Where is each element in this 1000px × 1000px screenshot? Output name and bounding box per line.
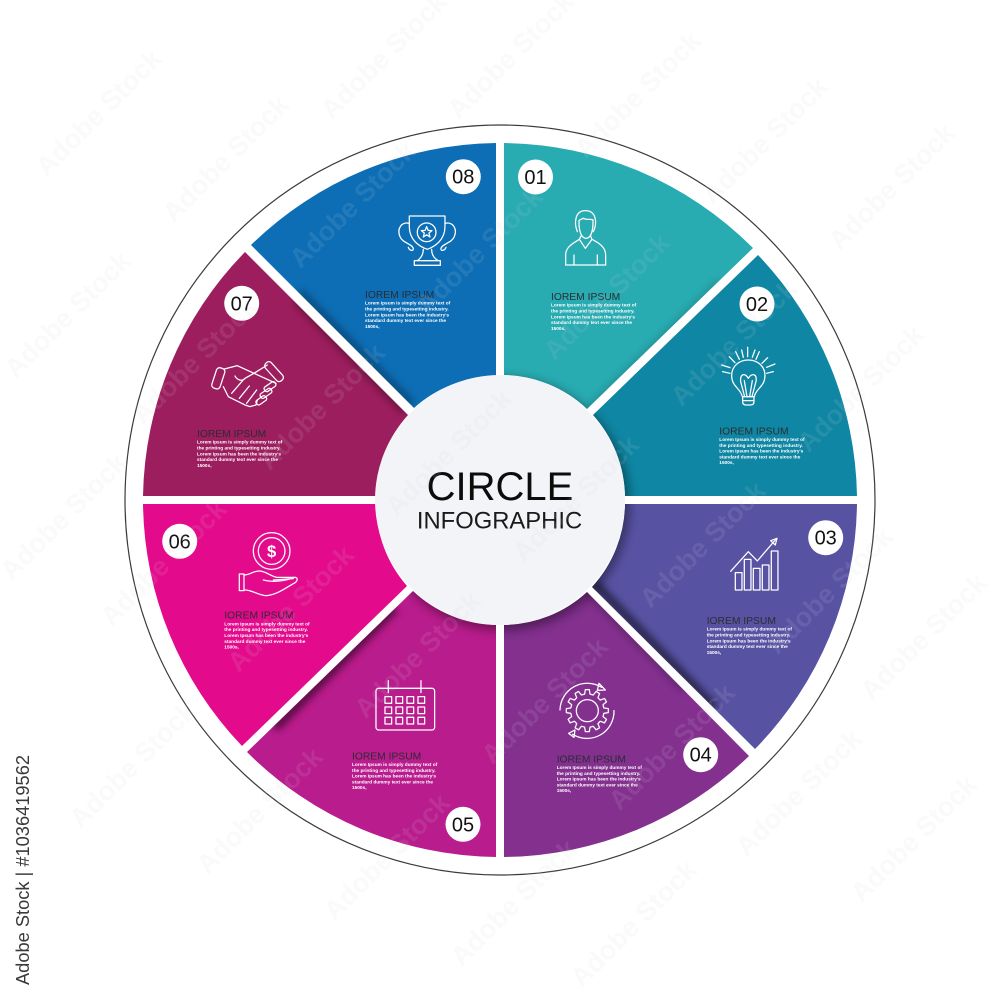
stock watermark: Adobe Stock [349, 585, 487, 724]
panel: segment 02 [593, 255, 857, 498]
panel: segment 03 [592, 502, 857, 749]
number badge 06 [162, 524, 197, 559]
center circle with title [375, 375, 625, 625]
number badge 08 [446, 159, 481, 194]
stock watermark: Adobe Stock [318, 787, 456, 926]
text block 04: Lorem Ipsum is simply dummy text of [557, 765, 642, 771]
text block 07: IOREM IPSUM [197, 429, 266, 440]
text block 02: Lorem Ipsum is simply dummy text of [719, 437, 805, 443]
panel: segment 05 [247, 591, 498, 857]
stock watermark: Adobe Stock [538, 227, 676, 366]
number badge 07: 07 [231, 293, 253, 315]
icon: coin in hand: $ [267, 542, 277, 561]
number badge 07 [224, 286, 259, 321]
text block 05: IOREM IPSUM [352, 751, 421, 762]
text block 07: Lorem Ipsum has been the industry's [197, 451, 281, 457]
text block 01: IOREM IPSUM [551, 292, 620, 303]
outer ring [125, 125, 875, 875]
panel: segment 01 [502, 143, 753, 409]
text block 06: the printing and typesetting industry. [224, 627, 308, 633]
stock watermark: Adobe Stock [845, 769, 983, 908]
number badge 08: 08 [452, 167, 474, 189]
stock watermark: Adobe Stock [95, 493, 233, 632]
stock watermark: Adobe Stock [507, 429, 645, 568]
stock watermark: Adobe Stock [445, 833, 583, 972]
text block 07: the printing and typesetting industry. [197, 446, 281, 452]
icon: trophy [399, 216, 455, 265]
icon: gear with cycle arrows [560, 683, 614, 738]
text block 05: Lorem Ipsum has been the industry's [352, 774, 436, 780]
number badge 01: 01 [524, 167, 547, 189]
icon: coin in hand [239, 533, 297, 596]
text block 01: standard dummy text ever since the [551, 320, 632, 326]
stock watermark: Adobe Stock [569, 25, 707, 164]
text block 03: IOREM IPSUM [707, 616, 776, 627]
stock watermark: Adobe Stock [603, 677, 741, 816]
text block 04: 1500s, [557, 788, 571, 794]
inner circle shadow [376, 377, 630, 631]
text block 07: Lorem Ipsum is simply dummy text of [197, 440, 283, 446]
stock watermark: Adobe Stock [730, 723, 868, 862]
text block 08 [365, 290, 451, 330]
text block 06: IOREM IPSUM [224, 611, 294, 622]
number badge 04: 04 [690, 745, 712, 767]
stock watermark: Adobe Stock [30, 43, 168, 182]
panel: segment 04 [502, 592, 749, 857]
text block 01: Lorem Ipsum is simply dummy text of [551, 303, 637, 309]
text block 08: the printing and typesetting industry. [365, 306, 449, 312]
number badge 05: 05 [452, 814, 474, 836]
text block 03: Lorem Ipsum has been the industry's [707, 638, 791, 644]
text block 01: 1500s, [551, 326, 566, 332]
number badge 06: 06 [169, 531, 191, 553]
stock watermark: Adobe Stock [284, 135, 422, 274]
text block 08: Lorem Ipsum has been the industry's [365, 312, 449, 318]
stock watermark: Adobe Stock [157, 89, 295, 228]
number badge 05 [446, 807, 480, 842]
text block 03: 1500s, [707, 650, 721, 656]
stock watermark: Adobe Stock [761, 521, 899, 660]
stock watermark: Adobe Stock [253, 337, 391, 476]
stock watermark: Adobe Stock [792, 319, 930, 458]
stock id caption: Adobe Stock | #1036419562 [13, 755, 33, 985]
text block 04 [557, 754, 642, 794]
stock watermark: Adobe Stock [222, 539, 360, 678]
number badge 03 [808, 520, 843, 555]
text block 04: IOREM IPSUM [557, 754, 626, 765]
title: CIRCLE [427, 465, 573, 509]
stock watermark: Adobe Stock [855, 567, 993, 706]
panel: segment 07 [143, 252, 408, 498]
text block 06: Lorem Ipsum has been the industry's [224, 633, 309, 639]
panel: segment 08 [251, 143, 498, 408]
text block 06: 1500s, [224, 645, 239, 651]
number badge 03: 03 [815, 528, 837, 550]
icon: handshake [211, 360, 285, 407]
text block 07: 1500s, [197, 463, 212, 469]
number badge 02 [740, 286, 774, 322]
text block 05: 1500s, [352, 785, 367, 791]
text block 02: Lorem Ipsum has been the industry's [719, 449, 804, 455]
text block 04: Lorem Ipsum has been the industry's [557, 777, 641, 783]
text block 08: 1500s, [365, 324, 380, 330]
stock watermark: Adobe Stock [0, 245, 137, 384]
text block 05 [352, 751, 438, 791]
text block 03: the printing and typesetting industry. [707, 632, 790, 638]
stock watermark: Adobe Stock [565, 854, 703, 993]
number badge 01 [518, 160, 553, 194]
stock watermark: Adobe Stock [126, 291, 264, 430]
number badge 02: 02 [746, 294, 768, 316]
text block 01: Lorem Ipsum has been the industry's [551, 314, 635, 320]
stock watermark: Adobe Stock [411, 181, 549, 320]
text block 07 [197, 429, 283, 469]
text block 03 [707, 616, 792, 656]
panel: segment 06 [143, 502, 407, 746]
number badge 04 [683, 737, 718, 772]
stock watermark: Adobe Stock [476, 631, 614, 770]
subtitle: INFOGRAPHIC [417, 508, 582, 535]
text block 08: Lorem Ipsum is simply dummy text of [365, 301, 451, 307]
stock watermark: Adobe Stock [696, 71, 834, 210]
icon: calendar [376, 681, 435, 730]
stock watermark: Adobe Stock [380, 383, 518, 522]
text block 06 [224, 611, 310, 651]
stock watermark: Adobe Stock [823, 117, 961, 256]
text block 06: standard dummy text ever since the [224, 639, 306, 645]
text block 01 [551, 292, 637, 332]
text block 02: IOREM IPSUM [719, 426, 789, 437]
icon: growth chart [731, 538, 778, 590]
text block 05: Lorem Ipsum is simply dummy text of [352, 762, 438, 768]
text block 03: standard dummy text ever since the [707, 644, 788, 650]
text block 05: standard dummy text ever since the [352, 779, 433, 785]
text block 05: the printing and typesetting industry. [352, 768, 436, 774]
text block 03: Lorem Ipsum is simply dummy text of [707, 627, 792, 633]
stock watermark: Adobe Stock [64, 695, 202, 834]
text block 02 [719, 426, 805, 466]
text block 02: 1500s, [719, 460, 734, 466]
stock watermark: Adobe Stock [665, 273, 803, 412]
stock watermark: Adobe Stock [634, 475, 772, 614]
text block 02: the printing and typesetting industry. [719, 443, 803, 449]
text block 01: the printing and typesetting industry. [551, 308, 635, 314]
text block 08: IOREM IPSUM [365, 290, 434, 301]
text block 08: standard dummy text ever since the [365, 318, 446, 324]
text block 07: standard dummy text ever since the [197, 457, 278, 463]
text block 06: Lorem Ipsum is simply dummy text of [224, 621, 310, 627]
stock watermark: Adobe Stock [191, 741, 329, 880]
text block 02: standard dummy text ever since the [719, 454, 801, 460]
text block 04: standard dummy text ever since the [557, 782, 638, 788]
text block 04: the printing and typesetting industry. [557, 771, 640, 777]
icon: light bulb [722, 347, 775, 405]
icon: person [566, 211, 606, 265]
